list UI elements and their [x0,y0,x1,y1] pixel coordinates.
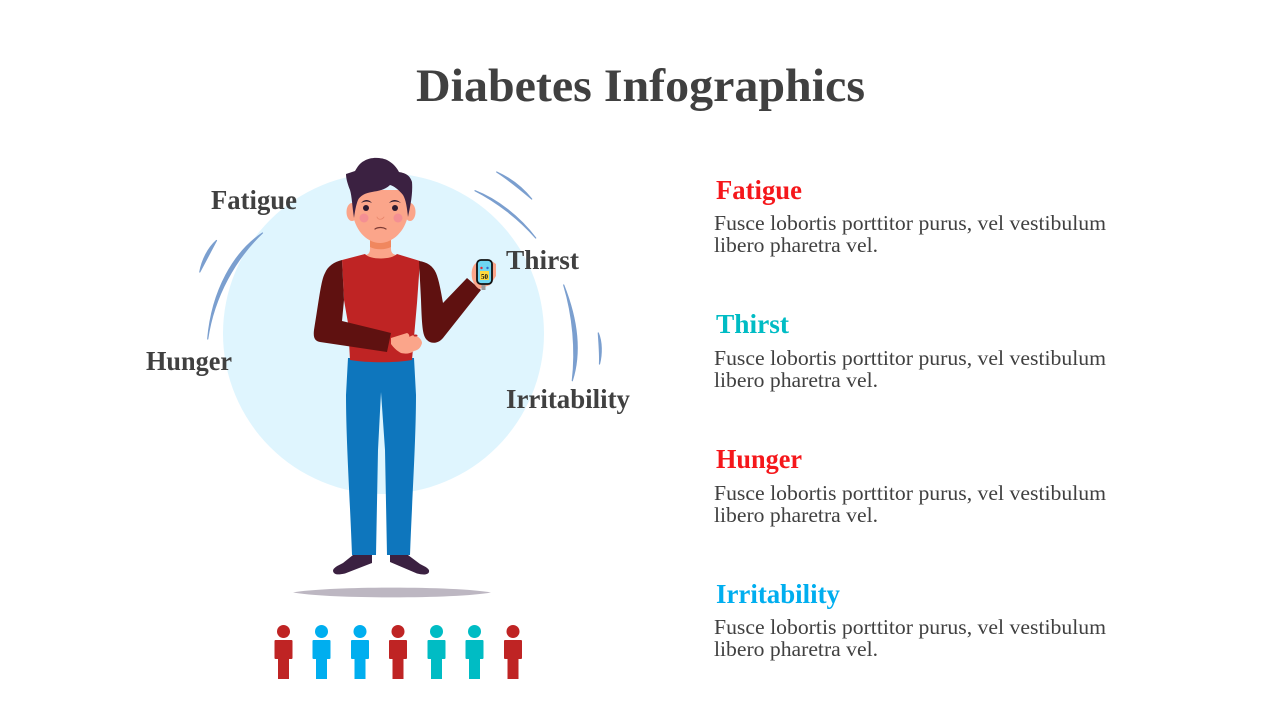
panel: Fatigue [714,175,1106,257]
description: Thirst: Fusce lobortis porttitor purus, vel vestibulum [714,346,1106,370]
belly hand [391,333,422,354]
heading: Hunger: Hunger [716,444,802,474]
neck [365,232,397,260]
description: Fatigue: libero pharetra vel. [714,233,878,257]
shirt [342,254,420,362]
panel: Thirst [714,309,1106,392]
row of person icons [274,625,522,679]
label: Hunger: Hunger [146,346,232,376]
eyes and eyebrows [361,200,401,211]
arcs around the figure [200,172,601,381]
right sleeve [419,261,481,343]
person icon 3 [351,625,369,679]
title: Diabetes Infographics [416,60,865,112]
person illustration [314,158,496,574]
left sleeve [314,260,391,352]
heading: Irritability: Irritability [716,579,840,609]
panel: Irritability [714,579,1106,661]
person icon 6 [466,625,484,679]
heading: Fatigue: Fatigue [716,175,802,205]
description: Fatigue: Fusce lobortis porttitor purus, vel vestibulum [714,211,1106,235]
hair [346,158,412,218]
label: Thirst: Thirst [506,245,579,275]
label: Fatigue: Fatigue [211,185,297,215]
face [353,190,408,243]
cheeks [360,214,402,222]
shoes [333,555,429,574]
background circle [223,173,544,494]
description: Irritability: Fusce lobortis porttitor purus, vel vestibulum [714,615,1106,639]
ground shadow [293,588,491,597]
glucose meter: 50 [481,272,488,281]
heading: Thirst: Thirst [716,309,789,339]
person icon 1 [274,625,292,679]
person icon 7 [504,625,522,679]
person icon 2 [312,625,330,679]
fingernail [414,334,418,336]
panel: Hunger [714,444,1106,527]
label: Irritability: Irritability [506,384,630,414]
description: Thirst: libero pharetra vel. [714,368,878,392]
person icon 5 [428,625,446,679]
glucose meter [477,260,492,290]
description: Hunger: libero pharetra vel. [714,503,878,527]
nose and mouth [375,217,386,229]
raised hand [472,260,496,289]
description: Irritability: libero pharetra vel. [714,637,878,661]
person icon 4 [389,625,407,679]
ears [346,203,416,221]
description: Hunger: Fusce lobortis porttitor purus, vel vestibulum [714,481,1106,505]
trousers [346,358,416,555]
